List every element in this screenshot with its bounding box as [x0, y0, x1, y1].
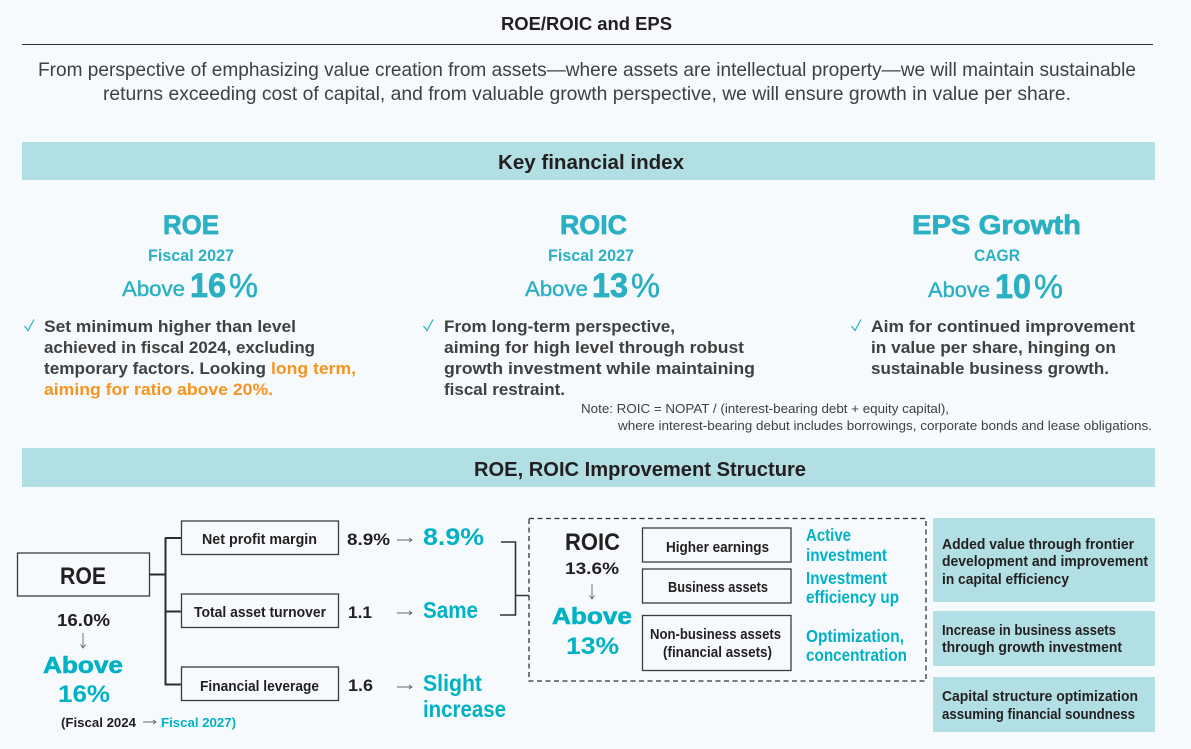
net profit margin row: Net profit margin: [202, 532, 317, 548]
ROE box: [18, 553, 150, 596]
ROIC heading: ROIC: [560, 210, 627, 240]
financial leverage row: Slight: [423, 670, 482, 696]
intro text: From perspective of emphasizing value creation from assets—where assets are intellectual property—we will maintain sustainable: [38, 59, 1136, 81]
total asset turnover row: Total asset turnover: [194, 605, 326, 621]
note: where interest-bearing debut includes borrowings, corporate bonds and lease obligations.: [617, 418, 1152, 433]
heading: improvement structure: [22, 448, 1155, 487]
ROIC description: growth investment while maintaining: [444, 360, 755, 378]
callout: business assets increase: [933, 611, 1155, 666]
ROIC description: [444, 318, 755, 399]
panel: ROIC target: [424, 210, 755, 399]
ROIC values: 13.6%: [565, 559, 619, 578]
total asset turnover row: Same: [423, 597, 478, 623]
ROE description: aiming for ratio above 20%.: [44, 381, 273, 399]
total asset turnover row: 1.1: [348, 603, 372, 622]
ROE target value: Above: [122, 278, 185, 301]
ROE description: long term,: [271, 360, 356, 378]
callout: added value: [933, 518, 1155, 602]
non-business assets row: Optimization,: [806, 626, 904, 646]
ROIC description: aiming for high level through robust: [444, 339, 745, 357]
callout: business assets increase: Increase in business assets: [942, 622, 1116, 639]
non-business assets row: [642, 616, 907, 670]
business assets row: Business assets: [668, 579, 768, 596]
ROIC target value: [525, 267, 660, 305]
higher earnings row: Higher earnings: [666, 539, 769, 556]
ROE values: Fiscal 2027): [161, 715, 236, 730]
ROE heading: ROE: [163, 210, 219, 240]
ROE target value: 16: [190, 267, 226, 305]
ROE target value: %: [229, 267, 258, 304]
ROE values: 16.0%: [57, 610, 110, 630]
ROIC description: From long-term perspective,: [444, 318, 675, 336]
intro text: [38, 59, 1136, 105]
EPS description: Aim for continued improvement: [871, 318, 1136, 336]
heading: key financial index: Key financial index: [498, 152, 684, 174]
panel: ROE target: [24, 210, 356, 399]
icon: check mark: [24, 320, 34, 330]
ROIC values: 13%: [566, 633, 619, 660]
ROE values: Above: [43, 652, 123, 678]
intro text: returns exceeding cost of capital, and from valuable growth perspective, we will ensure growth in value per share.: [103, 83, 1071, 105]
non-business assets row: concentration: [806, 645, 907, 665]
EPS target value: 10: [995, 268, 1031, 306]
ROE description: temporary factors. Looking: [44, 360, 266, 378]
EPS heading: EPS Growth: [912, 210, 1081, 240]
panel: ROIC structure: [529, 518, 926, 681]
ROIC description: fiscal restraint.: [444, 381, 565, 399]
heading: improvement structure: ROE, ROIC Improvement Structure: [474, 459, 806, 481]
total asset turnover row: [182, 594, 478, 628]
ROE description: achieved in fiscal 2024, excluding: [44, 339, 315, 357]
ROIC values: ROIC: [565, 529, 620, 556]
non-business assets row: (financial assets): [663, 644, 772, 661]
ROE values: (Fiscal 2024: [61, 715, 137, 730]
higher earnings row: [642, 525, 887, 565]
financial leverage row: 1.6: [348, 676, 373, 695]
EPS target value: [928, 268, 1063, 306]
callout: capital structure: [933, 677, 1155, 732]
EPS description: in value per share, hinging on: [871, 339, 1116, 357]
EPS period: CAGR: [974, 246, 1020, 265]
icon: check mark: [852, 320, 861, 330]
business assets row: [642, 568, 899, 607]
business assets row: Investment: [806, 568, 887, 588]
financial leverage row: [182, 667, 506, 722]
higher earnings row: investment: [806, 545, 887, 565]
callout: added value: development and improvement: [942, 553, 1148, 570]
ROE description: Set minimum higher than level: [44, 318, 296, 336]
net profit margin row: [182, 521, 484, 554]
note: [581, 401, 1152, 433]
ROE period: Fiscal 2027: [148, 246, 234, 265]
non-business assets row: Non-business assets: [650, 626, 781, 643]
ROE box: ROE: [60, 563, 106, 590]
business assets row: efficiency up: [806, 587, 899, 607]
ROE description: [44, 318, 356, 399]
title: ROE/ROIC and EPS: [501, 14, 672, 34]
ROE values: [43, 610, 236, 730]
icon: check mark: [424, 320, 433, 330]
ROIC period: Fiscal 2027: [548, 246, 634, 265]
tree connector: [149, 538, 182, 685]
higher earnings row: Active: [806, 525, 851, 545]
ROIC target value: %: [631, 267, 660, 304]
panel: ROE tree: [18, 521, 506, 730]
financial leverage row: increase: [423, 696, 506, 722]
ROIC values: [552, 529, 632, 660]
ROIC values: Above: [552, 603, 632, 629]
ROE target value: [122, 267, 258, 305]
EPS target value: Above: [928, 279, 990, 302]
bracket connector: [500, 542, 529, 615]
net profit margin row: 8.9%: [423, 524, 484, 551]
note: Note: ROIC = NOPAT / (interest-bearing debt + equity capital),: [581, 401, 949, 416]
callout: capital structure: Capital structure optimization: [942, 688, 1138, 705]
EPS description: [871, 318, 1136, 378]
EPS description: sustainable business growth.: [871, 360, 1109, 378]
callout: capital structure: assuming financial soundness: [942, 706, 1135, 723]
callout: added value: in capital efficiency: [942, 571, 1070, 588]
panel: EPS growth target: [852, 210, 1136, 378]
ROE values: 16%: [58, 681, 110, 708]
ROIC target value: 13: [592, 267, 628, 305]
ROIC target value: Above: [525, 278, 588, 301]
EPS target value: %: [1034, 268, 1063, 305]
callout: business assets increase: through growth investment: [942, 639, 1122, 656]
financial leverage row: Financial leverage: [200, 679, 319, 695]
net profit margin row: 8.9%: [347, 530, 390, 549]
heading: key financial index: [22, 142, 1155, 180]
callout: added value: Added value through frontier: [942, 536, 1134, 553]
